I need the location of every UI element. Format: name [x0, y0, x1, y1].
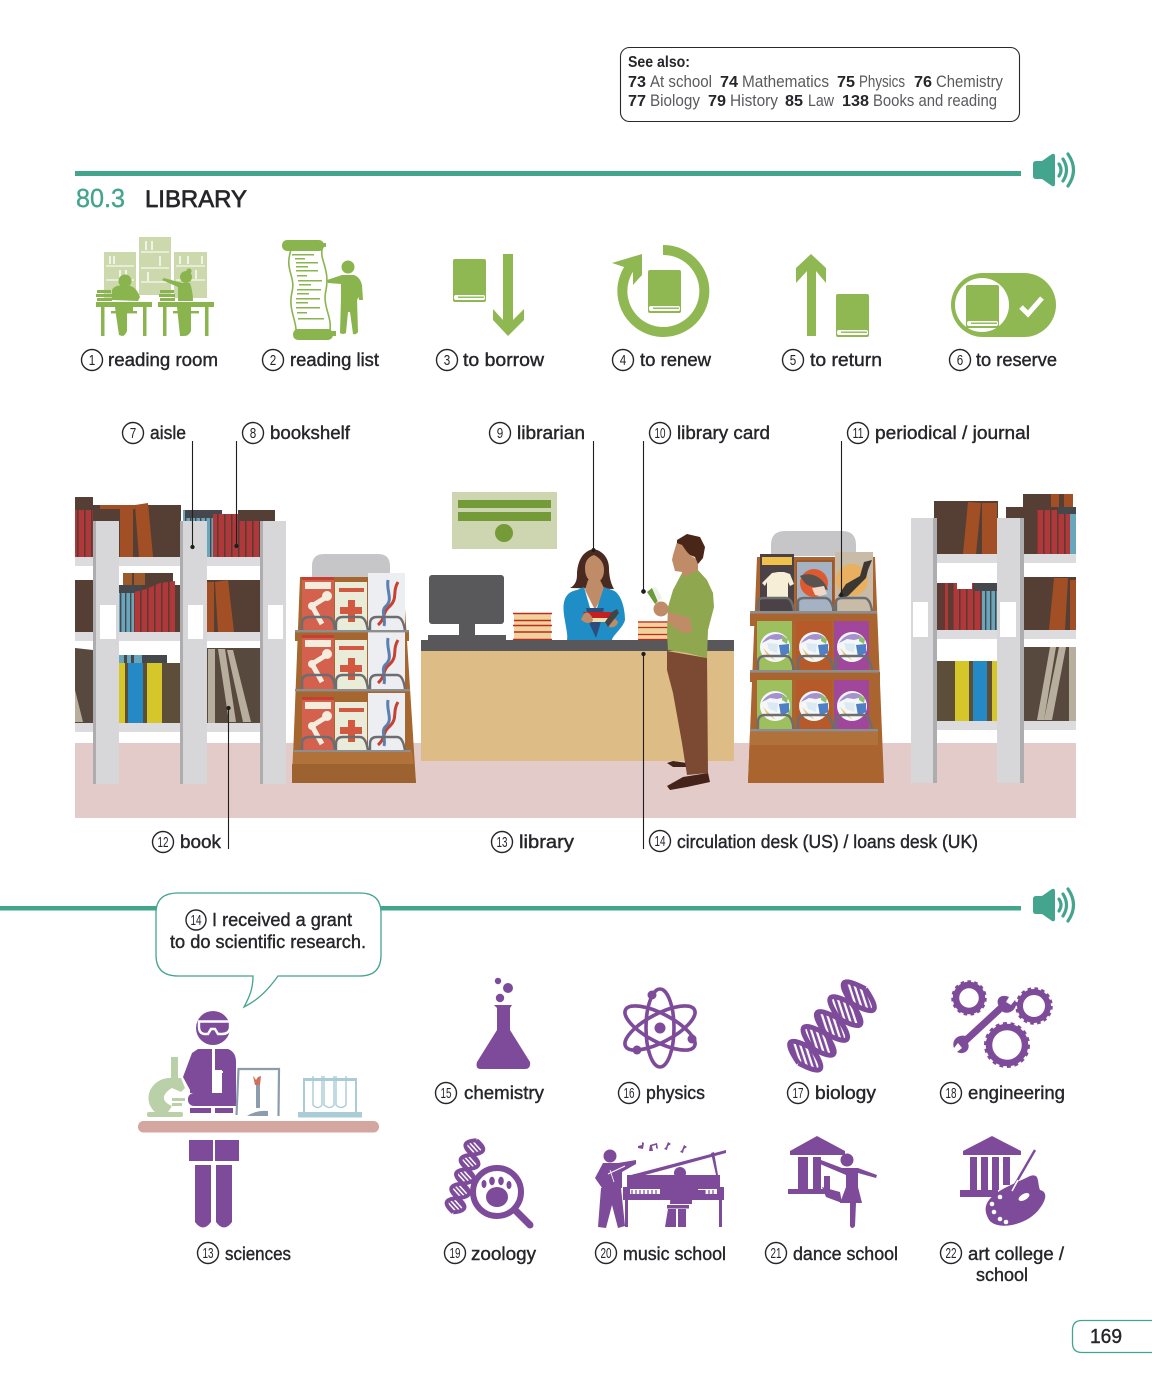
label: reading room: reading room — [108, 349, 218, 370]
librarian — [564, 549, 625, 640]
label: book: book — [180, 831, 222, 852]
speech bubble: to do scientific research. — [170, 931, 366, 952]
see also box: Chemistry — [936, 73, 1004, 91]
label: zoology: zoology — [471, 1243, 537, 1264]
label: library: library — [519, 831, 575, 852]
label: circulation desk: circulation desk (US) / loans desk (UK) — [677, 831, 978, 852]
label: zoology: 19 — [450, 1246, 460, 1262]
icon: physics — [619, 989, 701, 1067]
label: to borrow: to borrow — [463, 349, 545, 370]
icon: audio top — [1033, 154, 1074, 186]
floor — [75, 743, 1076, 818]
speech bubble: I received a grant — [212, 909, 352, 930]
label: bookshelf: 8 — [250, 426, 256, 442]
label: librarian: librarian — [517, 422, 585, 443]
page number — [1072, 1320, 1152, 1352]
icon: to return — [796, 254, 869, 337]
label: circulation desk: 14 — [654, 834, 666, 850]
see also box — [620, 48, 1020, 122]
label: chemistry: chemistry — [464, 1082, 545, 1103]
label: engineering: 18 — [946, 1086, 956, 1102]
label: biology: biology — [815, 1082, 877, 1103]
right bookshelf — [911, 494, 1076, 783]
label: librarian: 9 — [497, 426, 503, 442]
label: to return: to return — [810, 349, 882, 370]
label: sciences — [198, 1242, 291, 1264]
label: to borrow — [436, 349, 545, 370]
label: biology: 17 — [792, 1086, 804, 1102]
label: aisle: aisle — [150, 422, 186, 443]
label: physics — [618, 1082, 705, 1104]
label: librarian — [490, 422, 585, 444]
label: book: 12 — [158, 835, 168, 851]
speech bubble: 14 — [190, 913, 202, 929]
see also box: 74 — [720, 74, 738, 91]
icon: dance school — [788, 1136, 877, 1228]
see also box: 77 — [628, 93, 646, 110]
label: library card: 10 — [654, 426, 666, 442]
label: to borrow: 3 — [444, 353, 450, 369]
library sign — [452, 492, 557, 549]
icon: art college — [960, 1136, 1045, 1226]
label: chemistry: 15 — [440, 1086, 452, 1102]
icon: audio lower — [1033, 889, 1074, 921]
label: bookshelf: bookshelf — [270, 422, 351, 443]
see also box: 76 — [914, 74, 932, 91]
label: art college / school: school — [976, 1264, 1028, 1285]
label: sciences: sciences — [225, 1243, 291, 1264]
label: art college / school — [940, 1242, 1065, 1285]
label: reading list: reading list — [290, 349, 379, 370]
icon: reading list — [282, 240, 363, 340]
see also box: 73 — [628, 74, 646, 91]
book stack left — [513, 613, 552, 640]
icon: to borrow — [453, 254, 524, 336]
label: book — [152, 831, 222, 852]
section heading: LIBRARY — [145, 186, 247, 213]
page number: 169 — [1090, 1326, 1122, 1348]
see also box: Mathematics — [742, 73, 829, 91]
label: aisle — [122, 422, 186, 444]
label: dance school: dance school — [793, 1243, 898, 1264]
icon: chemistry — [476, 978, 530, 1069]
book stack right — [638, 621, 669, 640]
label: periodical / journal: periodical / journal — [875, 422, 1030, 443]
label: physics: physics — [646, 1082, 705, 1103]
label: zoology — [444, 1242, 537, 1264]
see also box: Books and reading — [873, 92, 997, 110]
see also box: At school — [650, 73, 712, 91]
label: to return — [782, 349, 882, 370]
label: art college / school: art college / — [968, 1243, 1065, 1264]
label: music school: 20 — [600, 1246, 612, 1262]
label: biology — [788, 1082, 877, 1104]
see also box: Physics — [859, 73, 905, 91]
icon: engineering — [953, 982, 1051, 1066]
icon: biology — [784, 975, 880, 1077]
see also box: 75 — [837, 74, 855, 91]
label: dance school: 21 — [770, 1246, 782, 1262]
label: to reserve: 6 — [957, 353, 963, 369]
library scene illustration — [75, 492, 1076, 818]
label: engineering: engineering — [968, 1082, 1065, 1103]
left bookshelf — [75, 497, 286, 784]
circulation desk — [421, 640, 734, 761]
label: to renew: 4 — [620, 353, 626, 369]
periodical rack: science — [292, 554, 416, 783]
label: sciences: 13 — [202, 1246, 214, 1262]
icon: to reserve — [951, 273, 1056, 337]
see also box: See also: — [628, 54, 690, 71]
section heading — [76, 183, 247, 213]
periodical rack: journals — [748, 531, 884, 783]
label: to reserve: to reserve — [976, 349, 1057, 370]
computer monitor — [428, 575, 506, 641]
pointer lines — [191, 441, 843, 849]
see also box: 138 — [842, 93, 869, 110]
label: to renew — [612, 349, 712, 370]
label: reading room: 1 — [89, 353, 95, 369]
label: aisle: 7 — [130, 426, 136, 442]
reader with library card — [647, 534, 714, 790]
label: to return: 5 — [790, 353, 796, 369]
see also box: Biology — [650, 92, 701, 110]
label: library: 13 — [496, 835, 508, 851]
see also box: History — [730, 92, 779, 110]
see also box: 79 — [708, 93, 726, 110]
label: library — [492, 831, 575, 852]
label: reading list: 2 — [270, 353, 276, 369]
label: art college / school: 22 — [946, 1246, 956, 1262]
label: periodical / journal: 11 — [852, 426, 864, 442]
icon: reading room — [96, 237, 214, 336]
icon: music school — [595, 1142, 726, 1228]
icon: scientist at lab bench — [138, 1011, 379, 1228]
see also box: 85 — [785, 93, 803, 110]
icon: zoology — [444, 1137, 530, 1225]
label: library card: library card — [677, 422, 770, 443]
see also box: Law — [808, 92, 834, 110]
label: music school: music school — [623, 1243, 726, 1264]
label: to renew: to renew — [640, 349, 712, 370]
speech bubble — [156, 893, 381, 1007]
label: physics: 16 — [624, 1086, 634, 1102]
icon: to renew — [612, 250, 704, 332]
section heading: 80.3 — [76, 183, 125, 213]
